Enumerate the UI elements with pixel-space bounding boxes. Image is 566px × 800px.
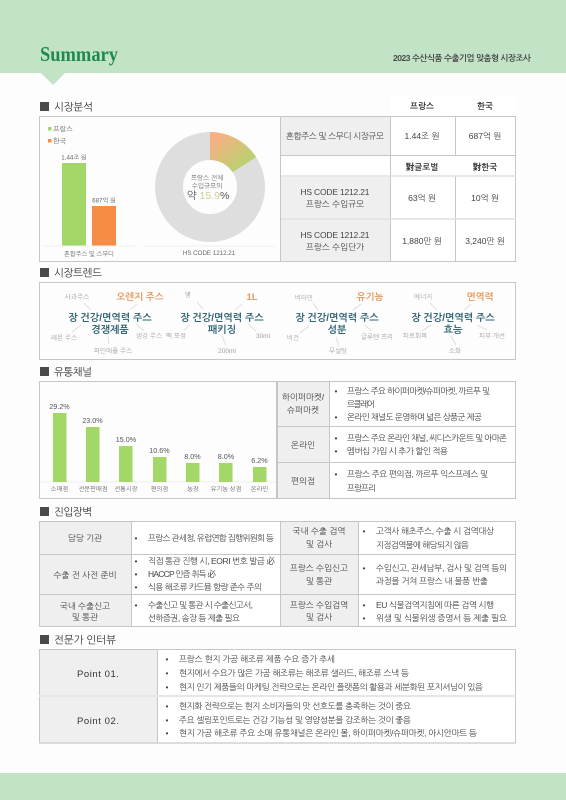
table: channel details: •: [334, 433, 338, 443]
row: french import declaration: 프랑스 수입신고: [290, 563, 348, 573]
trend: efficacy: 에너지: [414, 293, 432, 301]
table: market size: 1,880만 원: [402, 236, 442, 246]
table: market size: HS CODE 1212.21: [300, 187, 370, 197]
table: channel details: •: [334, 469, 338, 479]
values: 15.0%: [116, 435, 137, 444]
report name: 2023 수산식품 수출기업 맞춤형 시장조사: [393, 53, 532, 63]
trend: packaging: 장 건강/면역력 주스: [180, 312, 264, 324]
row: domestic customs: 국내 수출신고: [60, 601, 110, 611]
trend: efficacy: [403, 291, 505, 355]
trend: ingredients: 비타민: [295, 294, 313, 302]
row: domestic inspection: 및 검사: [306, 539, 332, 549]
trend: efficacy: 면역력: [467, 291, 493, 303]
row: domestic customs: 수출신고 및 통관 시 수출신고서,: [148, 600, 253, 610]
row: french inspection: 및 검사: [306, 612, 332, 622]
category labels: 전통시장: [114, 485, 138, 493]
trend: packaging: 팩 포장: [166, 332, 186, 340]
table: channel details: 프랑스 주요 하이퍼마켓/슈퍼마켓, 까르푸 및: [347, 386, 490, 396]
trend: packaging: 30ml: [256, 333, 271, 340]
row: domestic customs: •: [134, 600, 138, 610]
donut chart: import share: 수입규모의: [192, 182, 222, 190]
row: preparation: •: [134, 582, 138, 592]
table: market size: 프랑스: [410, 101, 434, 111]
table: market size: [281, 96, 516, 262]
panel: market analysis charts: [40, 116, 280, 262]
donut chart: import share: HS CODE 1212.21: [183, 250, 236, 257]
trend: competing products: 레몬 주스: [51, 334, 77, 342]
point 2: Point 02.: [77, 716, 119, 727]
bar chart: market size: 687억 원: [92, 196, 116, 204]
trend: ingredients: 성분: [328, 324, 347, 336]
point 1: •: [166, 654, 168, 664]
table: channel details: •: [334, 386, 338, 396]
trend: competing products: 장 건강/면역력 주스: [68, 312, 152, 324]
category labels: 전문판매점: [78, 485, 108, 493]
heading: distribution channels: 유통채널: [54, 366, 92, 378]
heading: expert interview: 전문가 인터뷰: [54, 634, 116, 646]
trend: ingredients: 글루텐 프리: [361, 333, 393, 341]
legend: [48, 126, 73, 146]
table: channel details: 온라인: [291, 440, 315, 450]
row: french inspection: •: [362, 613, 366, 623]
point 2: 현지화 전략으로는 현지 소비자들의 맛 선호도를 충족하는 것이 중요: [179, 701, 411, 711]
row: domestic customs: 및 통관: [72, 612, 98, 622]
row: domestic inspection: [293, 526, 495, 550]
heading: market analysis: 시장분석: [54, 102, 93, 114]
table: market size: 對글로벌: [406, 162, 438, 172]
category labels: 온라인: [251, 485, 268, 493]
table: market size: HS CODE 1212.21: [300, 230, 370, 240]
table: market size: 프랑스 수입규모: [306, 199, 364, 209]
row: domestic inspection: 고객사 해초주스, 수출 시 검역대상: [376, 526, 495, 536]
point 2: •: [166, 715, 168, 725]
row: preparation: [53, 556, 275, 592]
table: market size: 對한국: [473, 162, 497, 172]
table: market size: 프랑스 수입단가: [306, 242, 364, 252]
trend: packaging: 200ml: [218, 348, 236, 355]
row: french inspection: 위생 및 식물위생 증명서 등 제출 필요: [376, 613, 507, 623]
trend: competing products: [51, 292, 164, 355]
table: channel details: 프랑스 주요 온라인 채널, 씨디스카운트 및 아마존: [347, 433, 507, 443]
row: preparation: 직접 통관 진행 시, EORI 번호 발급 必: [148, 556, 275, 566]
title: Summary: [40, 42, 118, 66]
row: french inspection: EU 식물검역지침에 따른 검역 시행: [376, 600, 494, 610]
row: domestic inspection: 국내 수출 검역: [293, 526, 345, 536]
table: market size: 687억 원: [469, 131, 501, 141]
row: french inspection: [290, 600, 507, 623]
trend: ingredients: [287, 291, 393, 355]
table: market size: 3,240만 원: [465, 236, 505, 246]
row: domestic inspection: •: [362, 526, 366, 536]
trend: packaging: 병: [185, 291, 191, 299]
values: 6.2%: [251, 456, 268, 465]
trend: efficacy: 피로회복: [403, 332, 427, 340]
table: channel details: 프랑프리: [347, 483, 376, 493]
row: preparation: •: [134, 556, 138, 566]
table: channel details: 온라인 채널도 운영하며 넓은 상품군 제공: [347, 412, 482, 422]
panel: market trends: [40, 282, 516, 360]
point 2: 주요 셀링포인트로는 건강 기능성 및 영양성분을 강조하는 것이 좋음: [179, 715, 411, 725]
table: channel details: 르클레어: [347, 399, 375, 409]
row: french import declaration: [290, 563, 507, 586]
bar chart: market size: [43, 154, 135, 258]
trend: competing products: 사과주스: [65, 293, 89, 301]
bar chart: market size: 1.44조 원: [61, 154, 87, 162]
table: market size: 혼합주스 및 스무디 시장규모: [286, 131, 384, 141]
row: authority: •: [134, 533, 138, 543]
table: market size: 10억 원: [471, 193, 499, 203]
row: authority: [68, 533, 274, 543]
row: preparation: •: [134, 569, 138, 579]
table: market size: 1.44조 원: [405, 131, 439, 141]
table: channel details: •: [334, 412, 338, 422]
row: french inspection: •: [362, 600, 366, 610]
table: expert interview: [39, 649, 516, 743]
table: entry barriers: [39, 521, 516, 627]
row: authority: 담당 기관: [68, 533, 102, 543]
row: french inspection: 프랑스 수입검역: [290, 600, 348, 610]
heading: entry barriers: 진입장벽: [54, 506, 92, 518]
bar chart: market size: 혼합주스 및 스무디: [64, 250, 114, 258]
table: channel details: 편의점: [291, 476, 315, 486]
row: french import declaration: 및 통관: [306, 576, 332, 586]
trend: competing products: 생강 주스: [136, 332, 162, 340]
row: preparation: 식용 해조류 카드뮴 함량 준수 주의: [148, 582, 262, 592]
panel: channel bar chart: [40, 382, 276, 498]
category labels: 농장: [187, 485, 199, 493]
trend: ingredients: 비건: [287, 334, 299, 342]
trend: efficacy: 효능: [444, 324, 463, 336]
trend: packaging: 1L: [246, 292, 258, 303]
trend: ingredients: 유기농: [357, 291, 383, 303]
bars: [53, 413, 266, 482]
point 1: 프랑스 현지 가공 해조류 제품 수요 증가 추세: [179, 654, 335, 664]
point 1: •: [166, 682, 168, 692]
footer band: [0, 773, 566, 800]
row: preparation: 수출 전 사전 준비: [53, 570, 117, 580]
donut chart: import share: 프랑스 전체: [191, 174, 223, 182]
values: [49, 402, 268, 465]
row: french import declaration: 수입신고, 관세납부, 검사 및 검역 등의: [376, 563, 507, 573]
point 2: •: [166, 728, 168, 738]
trend: competing products: 경쟁제품: [91, 324, 129, 336]
row: domestic customs: 선하증권, 송장 등 제출 필요: [148, 613, 240, 623]
trend: competing products: 오렌지 주스: [116, 292, 164, 303]
point 2: 현지 가공 해조류 주요 소매 유통채널은 온라인 몰, 하이퍼마켓/슈퍼마켓, 아시안마트 등: [179, 728, 477, 738]
point 2: •: [166, 701, 168, 711]
table: channel details: 하이퍼마켓/: [282, 392, 325, 402]
row: authority: 프랑스 관세청, 유럽연합 집행위원회 등: [148, 533, 274, 543]
row: domestic customs: [60, 600, 253, 623]
values: 8.0%: [184, 452, 201, 461]
trend: competing products: 파인애플 주스: [94, 347, 132, 355]
legend: 한국: [53, 138, 67, 146]
trend: packaging: [166, 291, 271, 355]
point 1: 현지 인기 제품들의 마케팅 전략으로는 온라인 플랫폼의 활용과 세분화된 포지셔닝이 있음: [179, 682, 483, 692]
trend: efficacy: 장 건강/면역력 주스: [411, 312, 495, 324]
heading: market trends: 시장트렌드: [54, 268, 102, 280]
legend: 프랑스: [53, 126, 73, 134]
table: market size: 한국: [477, 101, 493, 111]
table: channel details: 프랑스 주요 편의점, 까르푸 익스프레스 및: [347, 469, 488, 479]
point 2: [77, 701, 477, 738]
table: market size: 63억 원: [408, 193, 436, 203]
trend: efficacy: 피부 개선: [479, 332, 505, 340]
category labels: 편의점: [151, 485, 168, 493]
values: 29.2%: [49, 402, 70, 411]
row: preparation: HACCP 인증 취득 必: [148, 569, 216, 579]
header band: [0, 0, 566, 85]
values: 8.0%: [218, 452, 235, 461]
table: channel details: 멤버십 가입 시 추가 할인 적용: [347, 446, 448, 456]
category labels: 유기농 상점: [211, 485, 241, 493]
point 1: Point 01.: [77, 669, 119, 680]
point 1: [77, 654, 483, 692]
donut chart: import share: [143, 132, 275, 257]
trend: ingredients: 무설탕: [329, 347, 347, 355]
row: french import declaration: •: [362, 563, 366, 573]
values: 23.0%: [82, 416, 103, 425]
table: channel details: [277, 381, 516, 499]
trend: packaging: 패키징: [208, 324, 236, 336]
category labels: [51, 485, 268, 493]
values: 10.6%: [149, 446, 170, 455]
table: channel details: 슈퍼마켓: [287, 405, 319, 415]
trend: ingredients: 장 건강/면역력 주스: [295, 312, 379, 324]
table: channel details: •: [334, 446, 338, 456]
trend: efficacy: 소화: [449, 347, 461, 355]
point 1: •: [166, 668, 168, 678]
donut chart: import share: 약 15.9%: [187, 190, 229, 202]
row: french import declaration: 과정을 거쳐 프랑스 내 물품 반출: [376, 576, 488, 586]
row: domestic inspection: 지정검역물에 해당되지 않음: [376, 540, 469, 550]
category labels: 소매점: [51, 485, 68, 493]
point 1: 현지에서 수요가 많은 가공 해조류는 해조류 샐러드, 해조류 스낵 등: [179, 668, 409, 678]
